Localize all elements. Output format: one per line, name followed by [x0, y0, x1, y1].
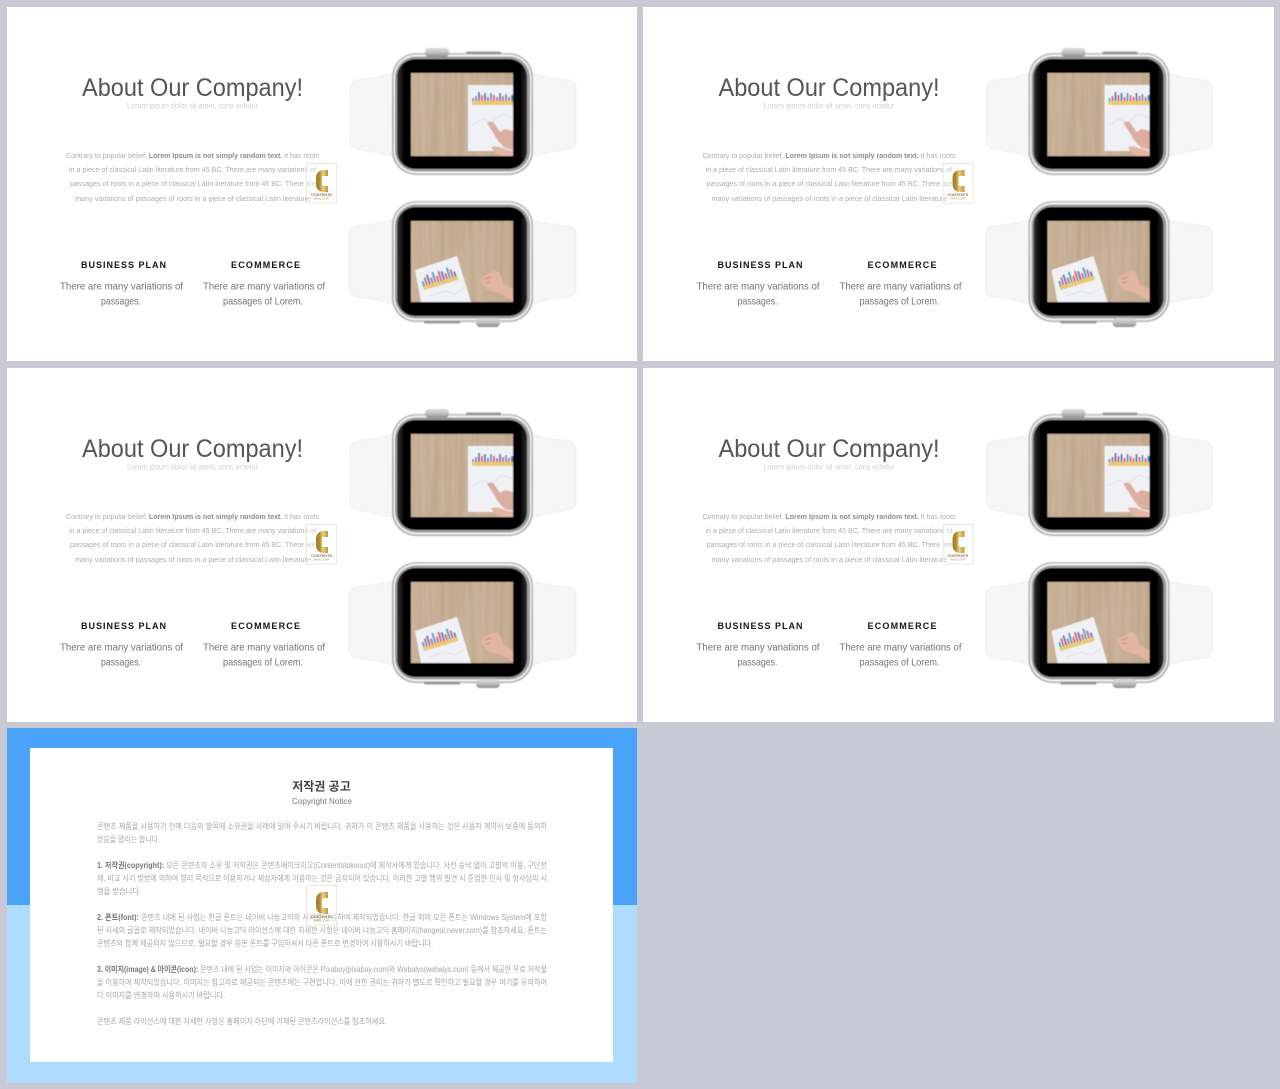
intro paragraph: many variations of passages of roots in a piece of classical Latin literature	[75, 555, 311, 564]
column: business plan: passages.	[738, 658, 778, 668]
column: ecommerce: ECOMMERCE	[231, 260, 300, 270]
column: ecommerce: ECOMMERCE	[231, 621, 300, 631]
heading: copyright notice: 저작권 공고	[292, 778, 351, 794]
logo stamp: MAKE CORP	[314, 196, 330, 200]
intro paragraph: passages of roots in a piece of classical Latin literature from 45 BC. There are	[70, 540, 316, 549]
column: ecommerce: There are many variations of	[203, 642, 325, 654]
intro paragraph: many variations of passages of roots in a piece of classical Latin literature	[712, 194, 948, 203]
logo stamp	[306, 886, 336, 925]
logo stamp: CONTENTS	[311, 915, 332, 919]
column: business plan	[60, 260, 183, 308]
column: business plan: There are many variations of	[696, 642, 820, 654]
logo stamp: MAKE CORP	[950, 196, 966, 200]
panel: copyright notice slide	[7, 728, 637, 1083]
panel: slide 4 about our company	[643, 368, 1274, 722]
logo stamp	[306, 524, 336, 564]
intro paragraph: passages of roots in a piece of classical Latin literature from 45 BC. There are	[706, 179, 952, 188]
notice text: font	[97, 912, 548, 948]
watch: bottom	[349, 201, 576, 327]
logo stamp: MAKE CORP	[314, 558, 330, 562]
notice text: copyright: 행을 받습니다.	[97, 886, 141, 896]
logo stamp	[943, 524, 973, 564]
intro paragraph: passages of roots in a piece of classical Latin literature from 45 BC. There are	[706, 540, 952, 549]
panel: slide 1 about our company	[7, 7, 637, 361]
column: business plan	[696, 260, 820, 308]
intro paragraph: in a piece of classical Latin literature from 45 BC. There are many variations of	[706, 526, 953, 535]
column: ecommerce: passages of Lorem.	[860, 296, 940, 308]
intro paragraph: Contrary to popular belief, Lorem Ipsum is not simply random text. It has roots	[66, 512, 319, 521]
watch: bottom	[986, 201, 1212, 327]
intro paragraph: many variations of passages of roots in a piece of classical Latin literature	[712, 555, 948, 564]
intro paragraph: many variations of passages of roots in a piece of classical Latin literature	[75, 194, 311, 203]
column: ecommerce	[840, 260, 962, 308]
column: ecommerce: There are many variations of	[840, 642, 962, 654]
logo stamp: CONTENTS	[311, 193, 332, 197]
column: business plan: BUSINESS PLAN	[718, 621, 802, 631]
column: ecommerce	[203, 260, 325, 308]
column: ecommerce	[203, 621, 325, 668]
notice text: font: 2. 폰트(font): 콘텐츠 내에 된 사업는 한글 폰트는 네이버 나눔고딕의 서체를 사용하여 제작되었습니다. 한글 외의 모든 폰트는 Windows System에 포함	[97, 912, 548, 922]
subtitle: Lorem ipsum dolor sit amet, cons ectetur	[127, 462, 258, 472]
notice text: font: 콘텐츠의 함께 제공되지 않으므로, 필요할 경우 원본 폰트를 구입하셔서 다른 폰트로 변경하여 사용하시기 바랍니다.	[97, 938, 433, 948]
column: ecommerce: passages of Lorem.	[223, 296, 303, 308]
logo stamp: CONTENTS	[948, 554, 969, 558]
logo stamp: MAKE CORP	[314, 918, 330, 922]
notice text: introduction: 셨음을 알리는 합니다.	[97, 834, 160, 844]
column: ecommerce: passages of Lorem.	[860, 658, 940, 668]
intro paragraph	[702, 512, 956, 564]
intro paragraph	[66, 151, 319, 203]
column: business plan: There are many variations of	[696, 282, 820, 292]
intro paragraph: Contrary to popular belief, Lorem Ipsum is not simply random text. It has roots	[702, 151, 956, 160]
heading: copyright notice: Copyright Notice	[292, 796, 352, 806]
panel: slide 2 about our company	[643, 7, 1274, 361]
column: business plan: passages.	[101, 658, 141, 668]
intro paragraph	[66, 512, 319, 564]
notice text: introduction: 콘텐츠 제품을 사용하기 전에 다음의 항목에 소유권을 사례에 읽어 주시기 바랍니다. 귀하가 이 콘텐츠 제품을 사용하는 것은 사용자 계약서 보증에 동의하	[97, 821, 548, 831]
watch: top	[986, 48, 1212, 175]
watch: top	[986, 409, 1212, 536]
column: business plan: BUSINESS PLAN	[718, 260, 802, 270]
watch: top	[350, 48, 576, 175]
notice text: license: 콘텐츠 제품 라이선스에 대한 자세한 사항은 홈페이지 하단에 기재된 콘텐츠라이선스를 참조하세요.	[97, 1016, 387, 1026]
notice text: font: 된 시세의 글꼴로 제작되었습니다. 네이버 나눔고딕 라이선스에 대한 자세한 사항은 네이버 나눔고딕 홈페이지(hangeul.naver.com)를 참조하세요. 폰트는	[97, 925, 547, 935]
panel: slide 3 about our company	[7, 368, 637, 722]
subtitle: Lorem ipsum dolor sit amet, cons ectetur	[764, 462, 895, 472]
column: business plan: passages.	[738, 296, 778, 308]
intro paragraph: Contrary to popular belief, Lorem Ipsum is not simply random text. It has roots	[702, 512, 956, 521]
column: ecommerce: ECOMMERCE	[868, 621, 936, 631]
watch: bottom	[986, 562, 1212, 688]
intro paragraph: in a piece of classical Latin literature from 45 BC. There are many variations of	[69, 165, 317, 174]
column: business plan: There are many variations of	[60, 282, 183, 292]
subtitle: Lorem ipsum dolor sit amet, cons ectetur	[127, 102, 258, 110]
notice text: image and icon: 다 이미지를 변경하여 사용하시기 바랍니다.	[97, 990, 225, 1000]
notice text: image and icon: 을 이용하여 제작되었습니다. 이미지는 참고자료 제공되는 콘텐츠에는 구현합니다. 이에 관한 권리는 귀하가 별도로 확인하고 필요할 경우 여기를 유의하여	[97, 977, 547, 987]
column: ecommerce: ECOMMERCE	[868, 260, 936, 270]
intro paragraph	[702, 151, 956, 203]
notice text: introduction	[97, 821, 548, 844]
logo stamp	[943, 164, 973, 203]
column: business plan: There are many variations of	[60, 642, 183, 654]
column: ecommerce	[840, 621, 962, 668]
column: ecommerce: There are many variations of	[840, 282, 962, 292]
logo stamp: CONTENTS	[948, 193, 969, 197]
watch: bottom	[349, 562, 576, 688]
title: About Our Company!	[718, 435, 940, 463]
intro paragraph: in a piece of classical Latin literature from 45 BC. There are many variations of	[69, 526, 317, 535]
notice text: image and icon	[97, 964, 547, 1000]
title: About Our Company!	[82, 435, 303, 463]
column: business plan	[696, 621, 820, 668]
title: About Our Company!	[82, 74, 303, 102]
notice text: copyright: 재, 비교 사기 방법에 의하여 영리 목적으로 이용하거나 제삼자에게 이용하는 것은 금지되어 있습니다. 이러한 고발 행위 발견 시 준엄한 민사 및 형사상의 시	[97, 873, 547, 883]
heading: copyright notice	[292, 778, 352, 806]
notice text: copyright: 1. 저작권(copyright): 모든 콘텐츠의 소유 및 저작권은 콘텐츠메이크이오(Contentstokeout)에 제작사에게 있습니다. 사전 승낙 없이 고발적 이용, 구단전	[97, 860, 547, 870]
title: About Our Company!	[718, 74, 940, 102]
intro paragraph: Contrary to popular belief, Lorem Ipsum is not simply random text. It has roots	[66, 151, 319, 160]
notice text: copyright	[97, 860, 547, 896]
column: ecommerce: There are many variations of	[203, 282, 325, 292]
intro paragraph: in a piece of classical Latin literature from 45 BC. There are many variations of	[706, 165, 953, 174]
column: business plan: BUSINESS PLAN	[81, 260, 166, 270]
intro paragraph: passages of roots in a piece of classical Latin literature from 45 BC. There are	[70, 179, 316, 188]
logo stamp	[306, 164, 336, 203]
column: business plan	[60, 621, 183, 668]
watch: top	[350, 409, 576, 536]
logo stamp: MAKE CORP	[950, 558, 966, 562]
notice text: image and icon: 3. 이미지(image) & 아이콘(icon): 콘텐츠 내에 된 사업는 이미지와 아이콘은 Pixabay(pixabay.com)와 Webalys(webalys.com) 등에서 제공한 무료 저작물	[97, 964, 547, 974]
subtitle: Lorem ipsum dolor sit amet, cons ectetur	[764, 102, 895, 110]
logo stamp: CONTENTS	[311, 554, 332, 558]
column: business plan: BUSINESS PLAN	[81, 621, 166, 631]
column: ecommerce: passages of Lorem.	[223, 658, 303, 668]
column: business plan: passages.	[101, 296, 141, 308]
